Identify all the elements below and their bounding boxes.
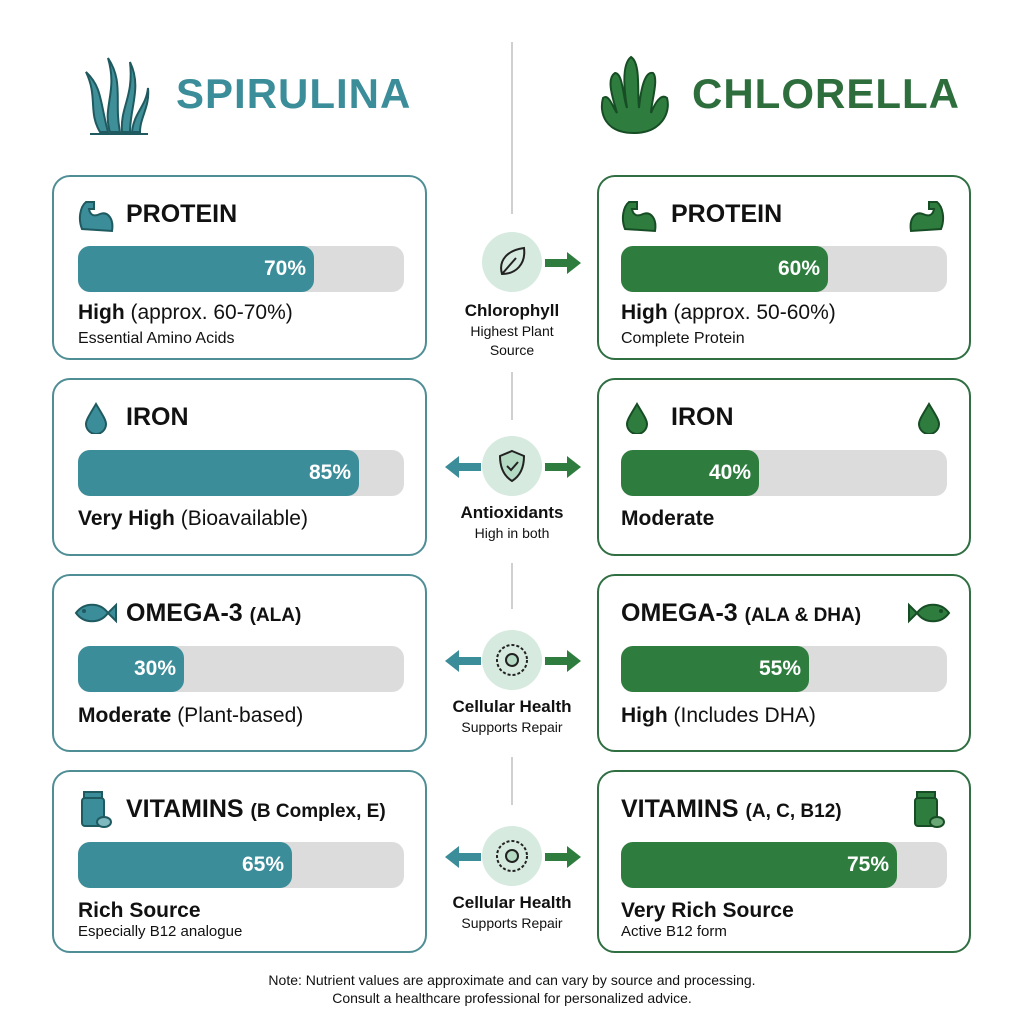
panel: chlorella iron <box>597 378 971 556</box>
center: antioxidants: High in both <box>475 525 549 541</box>
panel: chlorella iron: Moderate <box>621 507 714 530</box>
panel: chlorella vitamins: 75% <box>847 853 889 876</box>
center: chlorophyll: Chlorophyll <box>465 301 559 320</box>
panel: spirulina vitamins: Rich Source <box>78 899 201 922</box>
icon: chlorella seaweed <box>600 56 669 134</box>
panel: spirulina omega-3 <box>52 574 427 752</box>
panel: spirulina omega-3: OMEGA-3 (ALA) <box>126 599 301 627</box>
title: spirulina: SPIRULINA <box>176 70 411 117</box>
panel: chlorella omega-3: OMEGA-3 (ALA & DHA) <box>621 599 861 627</box>
center: cellular health 2: Supports Repair <box>461 915 563 931</box>
panel: chlorella iron: 40% <box>709 461 751 484</box>
panel: spirulina iron: 85% <box>309 461 351 484</box>
panel: chlorella omega-3: High (Includes DHA) <box>621 704 816 727</box>
panel: chlorella vitamins: VITAMINS (A, C, B12) <box>621 795 842 823</box>
center: chlorophyll: Source <box>490 342 534 358</box>
panel: spirulina protein: High (approx. 60-70%) <box>78 301 293 324</box>
center: chlorophyll <box>465 232 581 358</box>
panel: chlorella protein: Complete Protein <box>621 330 745 347</box>
panel: spirulina iron: IRON <box>126 403 188 431</box>
footnote: Consult a healthcare professional for personalized advice. <box>332 990 692 1006</box>
panel: spirulina vitamins <box>52 770 427 953</box>
panel: chlorella omega-3: 55% <box>759 657 801 680</box>
panel: spirulina vitamins: 65% <box>242 853 284 876</box>
panel: spirulina iron <box>52 378 427 556</box>
icon: muscle <box>78 201 114 232</box>
panel: chlorella protein: PROTEIN <box>671 200 782 228</box>
footnote <box>268 972 756 1006</box>
title: chlorella: CHLORELLA <box>692 70 960 117</box>
icon: spirulina seaweed <box>85 58 150 135</box>
center: chlorophyll: Highest Plant <box>470 323 554 339</box>
center: cellular health 2 <box>445 826 581 931</box>
panel: chlorella omega-3 <box>597 574 971 752</box>
panel: spirulina vitamins: VITAMINS (B Complex, E) <box>126 795 386 823</box>
panel: chlorella protein <box>597 175 971 360</box>
panel: spirulina omega-3: 30% <box>134 657 176 680</box>
panel: spirulina iron: Very High (Bioavailable) <box>78 507 308 530</box>
center: cellular health 1: Cellular Health <box>452 697 572 716</box>
panel: chlorella protein: High (approx. 50-60%) <box>621 301 836 324</box>
panel: spirulina protein: 70% <box>264 257 306 280</box>
center: antioxidants: Antioxidants <box>461 503 563 522</box>
panel: chlorella vitamins: Very Rich Source <box>621 899 794 922</box>
center: antioxidants <box>445 436 581 541</box>
panel: spirulina vitamins: Especially B12 analogue <box>78 923 242 940</box>
panel: chlorella protein: 60% <box>778 257 820 280</box>
center: cellular health 1 <box>445 630 581 735</box>
center: cellular health 1: Supports Repair <box>461 719 563 735</box>
panel: spirulina protein: PROTEIN <box>126 200 237 228</box>
panel: spirulina omega-3: Moderate (Plant-based) <box>78 704 303 727</box>
center: cellular health 2: Cellular Health <box>452 893 572 912</box>
panel: spirulina protein: Essential Amino Acids <box>78 330 235 347</box>
panel: chlorella vitamins: Active B12 form <box>621 923 727 940</box>
panel: chlorella iron: IRON <box>671 403 734 431</box>
footnote: Note: Nutrient values are approximate and can vary by source and processing. <box>268 972 756 988</box>
panel: spirulina protein <box>52 175 427 360</box>
panel: chlorella vitamins <box>597 770 971 953</box>
